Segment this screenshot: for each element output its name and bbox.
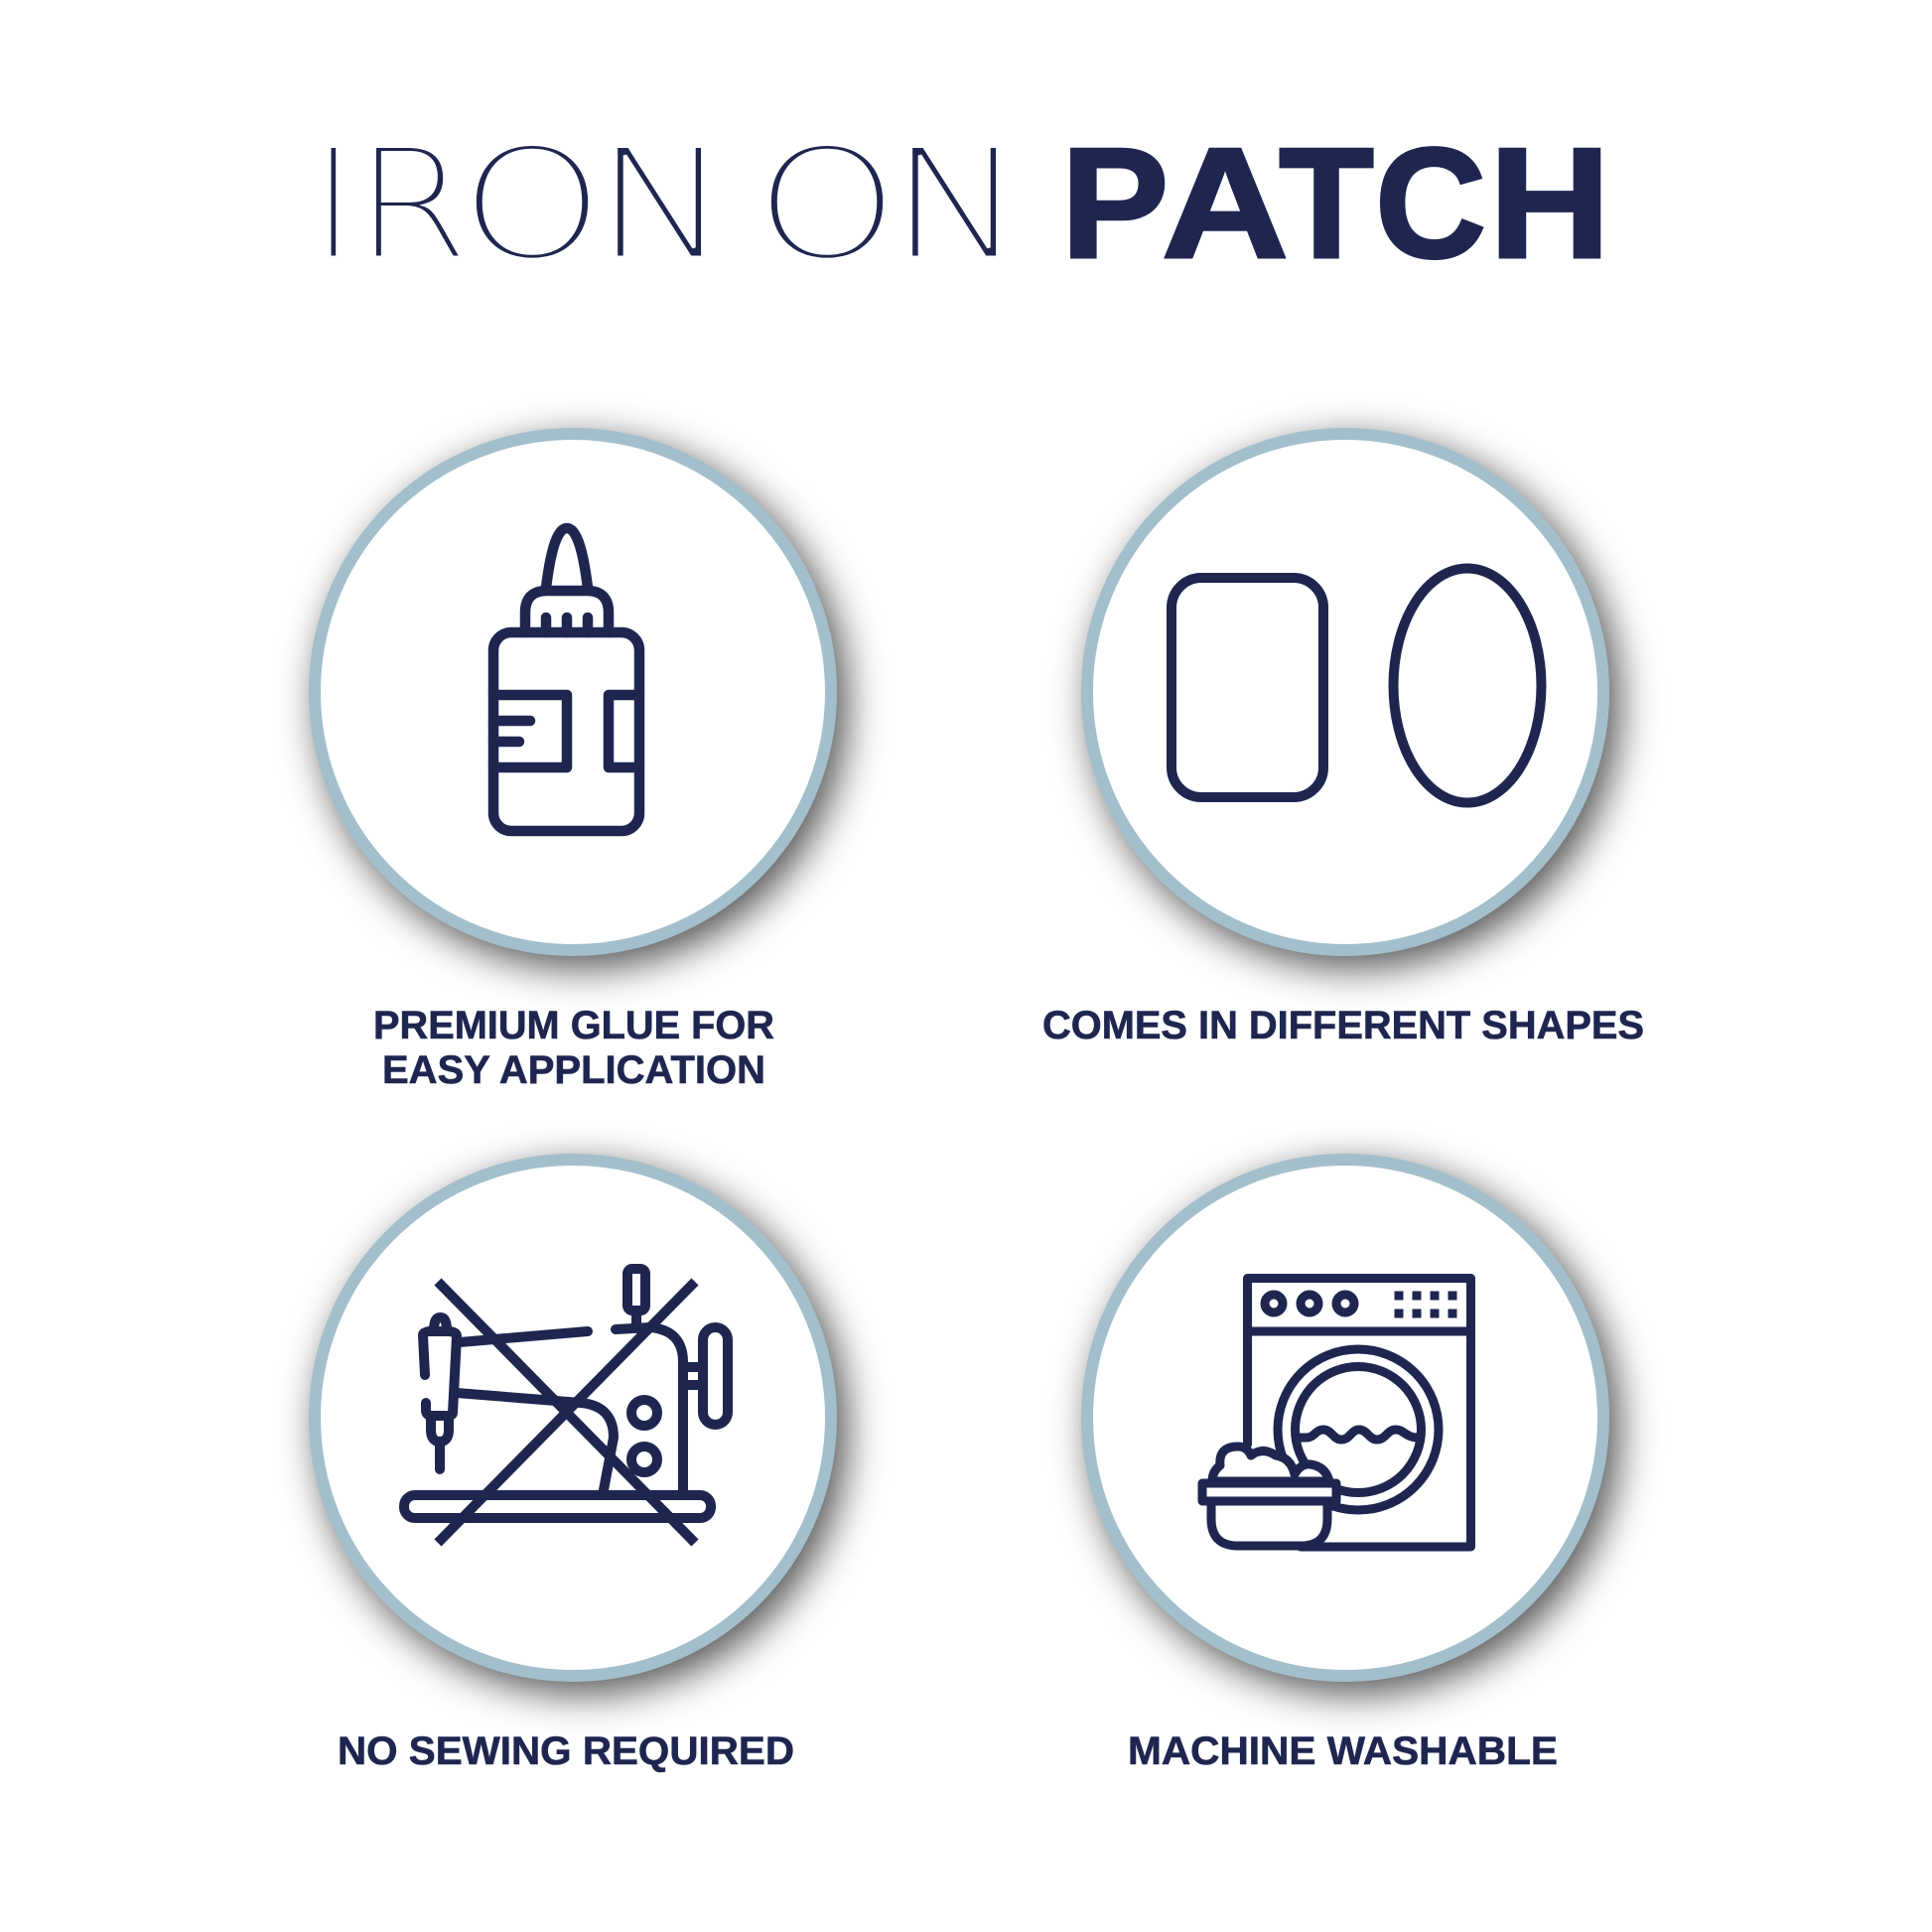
icon: crossed-out sewing machine bbox=[404, 1269, 728, 1543]
title: I bbox=[312, 116, 355, 293]
label: no sewing: NO SEWING REQUIRED bbox=[338, 1729, 794, 1773]
badge circle: glue bbox=[315, 434, 847, 968]
title: P bbox=[1061, 115, 1169, 290]
panel: no sewing bbox=[315, 1160, 847, 1773]
title: O bbox=[460, 117, 605, 294]
title: H bbox=[1489, 115, 1610, 291]
label: machine washable: MACHINE WASHABLE bbox=[1128, 1729, 1558, 1773]
panel: different shapes bbox=[1042, 434, 1644, 1047]
title: O bbox=[755, 117, 899, 294]
badge circle: washing bbox=[1087, 1160, 1619, 1694]
title bbox=[312, 115, 1610, 294]
badge circle: shapes bbox=[1087, 434, 1619, 968]
title: T bbox=[1279, 116, 1374, 291]
label: different shapes: COMES IN DIFFERENT SHAPES bbox=[1042, 1004, 1644, 1047]
title: C bbox=[1375, 116, 1486, 291]
badge circle: sewing bbox=[315, 1160, 847, 1694]
icon: washing machine with basin bbox=[1202, 1279, 1471, 1547]
panel: machine washable bbox=[1087, 1160, 1619, 1773]
icon: glue bottle bbox=[493, 528, 639, 831]
title: R bbox=[354, 116, 470, 293]
title: N bbox=[889, 116, 1026, 293]
panel: premium glue bbox=[315, 434, 847, 1092]
label: premium glue: PREMIUM GLUE FOR bbox=[373, 1004, 774, 1047]
title: N bbox=[594, 116, 731, 293]
label: premium glue: EASY APPLICATION bbox=[382, 1048, 765, 1092]
icon: rectangle and oval patches bbox=[1172, 568, 1541, 802]
label: premium glue bbox=[373, 1004, 774, 1092]
title: A bbox=[1162, 115, 1289, 291]
